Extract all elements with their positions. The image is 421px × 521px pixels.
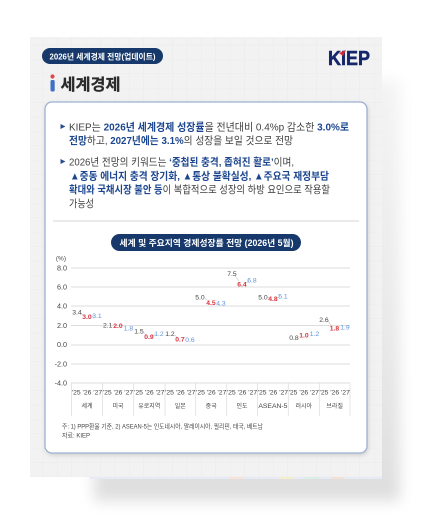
footnote <box>62 422 263 440</box>
2026 values: 2.0 <box>113 323 123 330</box>
2027 values: 6.8 <box>247 278 257 284</box>
2025 values: 7.5 <box>227 271 237 278</box>
y axis labels: 6.0 <box>57 282 67 292</box>
x axis region labels: 일본 <box>175 402 186 410</box>
2025 values: 1.5 <box>134 328 144 336</box>
2026 values <box>82 282 339 344</box>
2027 values: 1.9 <box>340 324 350 332</box>
header badge <box>42 48 163 64</box>
x axis region labels <box>81 402 343 410</box>
text block: keywords: ▲중동 에너지 충격 장기화, ▲통상 불확실성, ▲주요국 재정부담 <box>70 170 329 182</box>
KIEP logo: KIEP <box>328 48 370 70</box>
background panel <box>30 37 382 477</box>
x axis year labels: '25 '26 '27 <box>103 390 133 396</box>
text block: keywords: 확대와 국채시장 불안 등이 복합적으로 성장의 하방 요인으로 작용할 <box>69 183 330 196</box>
line chart: growth rates <box>55 256 350 416</box>
footnote: 자료: KIEP <box>62 430 90 440</box>
y axis labels: -4.0 <box>55 378 67 388</box>
2025 values: 3.4 <box>72 310 82 316</box>
colored bottom strip <box>90 477 382 479</box>
2027 values: 4.3 <box>216 300 226 308</box>
2025 values: 0.8 <box>289 335 299 342</box>
y axis labels: (%) <box>56 256 66 262</box>
x axis year labels <box>72 390 350 396</box>
chart title badge <box>111 234 301 251</box>
text block: growth outlook <box>60 120 349 147</box>
2027 values: 1.8 <box>124 326 133 332</box>
x axis region labels: 유로지역 <box>138 402 160 410</box>
x axis year labels: '25 '26 '27 <box>134 390 165 396</box>
y axis labels: 2.0 <box>57 321 67 330</box>
x axis year labels: '25 '26 '27 <box>258 390 288 396</box>
x axis region labels: 중국 <box>206 403 217 410</box>
2026 values: 0.9 <box>144 334 154 341</box>
y axis labels: -2.0 <box>55 360 67 368</box>
x axis region labels: 러시아 <box>296 402 313 410</box>
2027 values: 0.6 <box>185 337 195 344</box>
2026 values: 4.8 <box>268 296 278 303</box>
2026 values: 1.8 <box>330 326 339 332</box>
2027 values: 1.2 <box>154 331 164 338</box>
x axis year labels: '25 '26 '27 <box>72 390 102 396</box>
2026 values: 1.0 <box>299 332 309 340</box>
chart title badge: 세계 및 주요지역 경제성장률 전망 (2026년 5월) <box>120 237 294 248</box>
text block: keywords: 가능성 <box>69 198 94 210</box>
2026 values: 0.7 <box>175 336 185 344</box>
x axis region labels: 브라질 <box>326 402 343 410</box>
x axis year labels: '25 '26 '27 <box>196 390 227 396</box>
header badge: 2026년 세계경제 전망(업데이트) <box>50 52 156 62</box>
2027 values: 3.1 <box>92 313 102 320</box>
2025 values: 5.0 <box>195 294 205 302</box>
text block: growth outlook: KIEP는 2026년 세계경제 성장률을 전년대비 0.4%p 감소한 3.0%로 <box>69 120 349 134</box>
x axis year labels: '25 '26 '27 <box>227 390 257 396</box>
2026 values: 6.4 <box>237 282 247 288</box>
text block: growth outlook: 전망하고, 2027년에는 3.1%의 성장을 보일 것으로 전망 <box>69 134 293 147</box>
x axis year labels: '25 '26 '27 <box>165 390 196 396</box>
y axis labels: 0.0 <box>57 340 67 349</box>
2026 values: 3.0 <box>82 314 92 321</box>
footnote: 주: 1) PPP환율 기준, 2) ASEAN-5는 인도네시아, 말레이시아, 필리핀, 태국, 베트남 <box>62 422 263 430</box>
back shadow panel <box>94 80 400 501</box>
main card <box>45 102 368 455</box>
2025 values: 2.6 <box>319 317 329 324</box>
2027 values <box>92 278 350 344</box>
text block: keywords: 2026년 전망의 키워드는 ‘중첩된 충격, 좁혀진 활로’이며, <box>69 156 294 168</box>
2027 values: 5.1 <box>278 294 288 300</box>
2027 values: 1.2 <box>310 331 319 338</box>
x axis region labels: 미국 <box>112 402 124 410</box>
2025 values: 2.1 <box>103 322 113 330</box>
x axis year labels: '25 '26 '27 <box>320 390 350 396</box>
x axis region labels: 세계 <box>81 402 93 410</box>
x axis region labels: ASEAN-5 <box>258 403 288 410</box>
x axis separators <box>72 383 350 416</box>
2026 values: 4.5 <box>206 300 216 307</box>
2025 values <box>72 271 329 342</box>
connector lines <box>81 276 332 338</box>
section title: 세계경제 <box>60 76 120 94</box>
2025 values: 5.0 <box>258 294 268 302</box>
y axis labels: 4.0 <box>57 302 67 310</box>
y axis labels: 8.0 <box>57 264 67 272</box>
y axis labels <box>55 256 67 388</box>
text block: keywords <box>60 156 330 210</box>
2025 values: 1.2 <box>165 331 175 338</box>
section icon: i <box>50 74 55 92</box>
x axis region labels: 인도 <box>236 403 248 410</box>
x axis year labels: '25 '26 '27 <box>289 390 319 396</box>
